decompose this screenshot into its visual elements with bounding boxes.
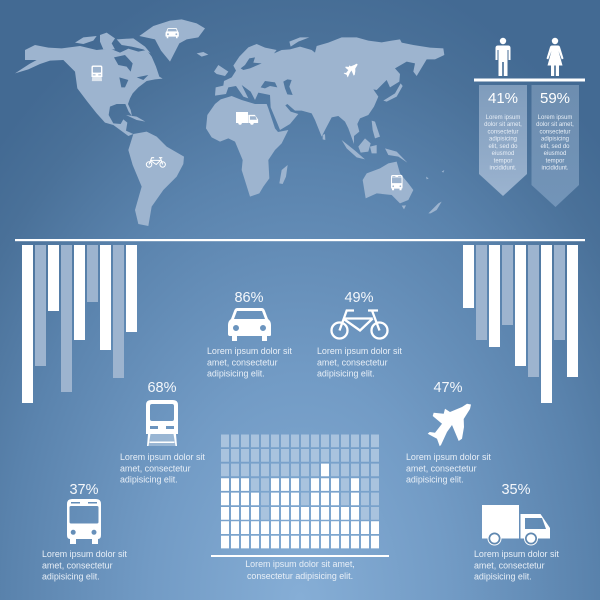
banner: 59%: dolor sit amet, bbox=[536, 122, 574, 128]
stat: bus 37%: adipisicing elit. bbox=[42, 572, 100, 582]
stat: truck 35%: Lorem ipsum dolor sit bbox=[474, 549, 559, 559]
map: americas and greenland bbox=[15, 19, 208, 226]
waffle baseline bbox=[211, 555, 389, 557]
stat: train 68% bbox=[120, 380, 205, 484]
stat: train 68%: 68% bbox=[147, 380, 177, 396]
stat: train 68%: Lorem ipsum dolor sit bbox=[120, 452, 205, 462]
waffle cells bbox=[221, 434, 379, 548]
stat: bicycle 49%: adipisicing elit. bbox=[317, 368, 375, 378]
stat: train 68%: amet, consectetur bbox=[120, 463, 191, 473]
banner: 59%: incididunt. bbox=[541, 166, 569, 172]
stat: car 86%: 86% bbox=[234, 290, 264, 306]
gender panel bbox=[474, 38, 585, 207]
stat: bus 37%: amet, consectetur bbox=[42, 560, 113, 570]
icon: woman bbox=[546, 38, 564, 76]
stat: plane 47%: Lorem ipsum dolor sit bbox=[406, 452, 491, 462]
banner: 41%: tempor bbox=[494, 158, 512, 164]
shelf line bbox=[474, 78, 585, 82]
stat: bus 37%: Lorem ipsum dolor sit bbox=[42, 549, 127, 559]
stat: car 86%: amet, consectetur bbox=[207, 357, 278, 367]
stat: car 86%: adipisicing elit. bbox=[207, 368, 265, 378]
banner: 41%: incididunt. bbox=[489, 166, 517, 172]
banner: 59%: Lorem ipsum bbox=[538, 115, 572, 121]
banner: 41% bbox=[479, 85, 527, 196]
banner: 41%: Lorem ipsum bbox=[486, 115, 520, 121]
icon: man bbox=[496, 38, 510, 76]
stat: bicycle 49%: Lorem ipsum dolor sit bbox=[317, 346, 402, 356]
banner: 59%: elit, sed do bbox=[540, 144, 570, 150]
map: eurasia africa oceania bbox=[206, 37, 444, 213]
stat: car 86% bbox=[207, 290, 292, 378]
map icon: train bbox=[92, 66, 102, 81]
stat: car 86%: Lorem ipsum dolor sit bbox=[207, 346, 292, 356]
left bar chart bbox=[22, 245, 137, 403]
icon: plane bbox=[428, 404, 471, 446]
map icon: car bbox=[166, 28, 179, 38]
stat: bicycle 49% bbox=[317, 290, 402, 378]
waffle caption: Lorem ipsum dolor sit amet, bbox=[245, 559, 355, 569]
banner: 41%: adipisicing bbox=[489, 137, 517, 143]
map icon: bus bbox=[391, 175, 403, 190]
waffle chart bbox=[211, 434, 389, 581]
banner: 41%: consectetur bbox=[487, 130, 519, 136]
map icon: plane bbox=[344, 64, 358, 77]
banner: 59%: consectetur bbox=[539, 130, 571, 136]
icon: bus bbox=[67, 499, 101, 544]
icon: car bbox=[228, 308, 271, 341]
stat: bicycle 49%: 49% bbox=[344, 290, 374, 306]
world map bbox=[15, 19, 444, 226]
banner: 59%: eiusmod bbox=[544, 151, 566, 157]
banner: 41%: 41% bbox=[488, 90, 518, 107]
stat: plane 47% bbox=[406, 380, 491, 484]
banner: 59%: adipisicing bbox=[541, 137, 569, 143]
map icon: bicycle bbox=[146, 158, 165, 167]
icon: train bbox=[146, 400, 178, 446]
banner: 41%: elit, sed do bbox=[488, 144, 518, 150]
stat: bus 37%: 37% bbox=[69, 482, 99, 498]
divider line bbox=[15, 239, 585, 241]
banner: 41%: dolor sit amet, bbox=[484, 122, 522, 128]
right bar chart bbox=[463, 245, 578, 403]
banner: 41%: eiusmod bbox=[492, 151, 514, 157]
stat: bicycle 49%: amet, consectetur bbox=[317, 357, 388, 367]
stat: plane 47%: amet, consectetur bbox=[406, 463, 477, 473]
icon: truck bbox=[482, 505, 550, 545]
stat: truck 35%: adipisicing elit. bbox=[474, 572, 532, 582]
banner: 59% bbox=[532, 85, 579, 207]
stat: plane 47%: 47% bbox=[433, 380, 463, 396]
stat: truck 35%: 35% bbox=[501, 482, 531, 498]
banner: 59%: 59% bbox=[540, 90, 570, 107]
banner: 59%: tempor bbox=[546, 158, 564, 164]
icon: bicycle bbox=[332, 310, 388, 338]
stat: bus 37% bbox=[42, 482, 127, 582]
stat: truck 35% bbox=[474, 482, 559, 582]
stat: truck 35%: amet, consectetur bbox=[474, 560, 545, 570]
waffle caption: consectetur adipisicing elit. bbox=[247, 571, 353, 581]
map icon: truck bbox=[236, 112, 258, 125]
stat: plane 47%: adipisicing elit. bbox=[406, 474, 464, 484]
stat: train 68%: adipisicing elit. bbox=[120, 474, 178, 484]
